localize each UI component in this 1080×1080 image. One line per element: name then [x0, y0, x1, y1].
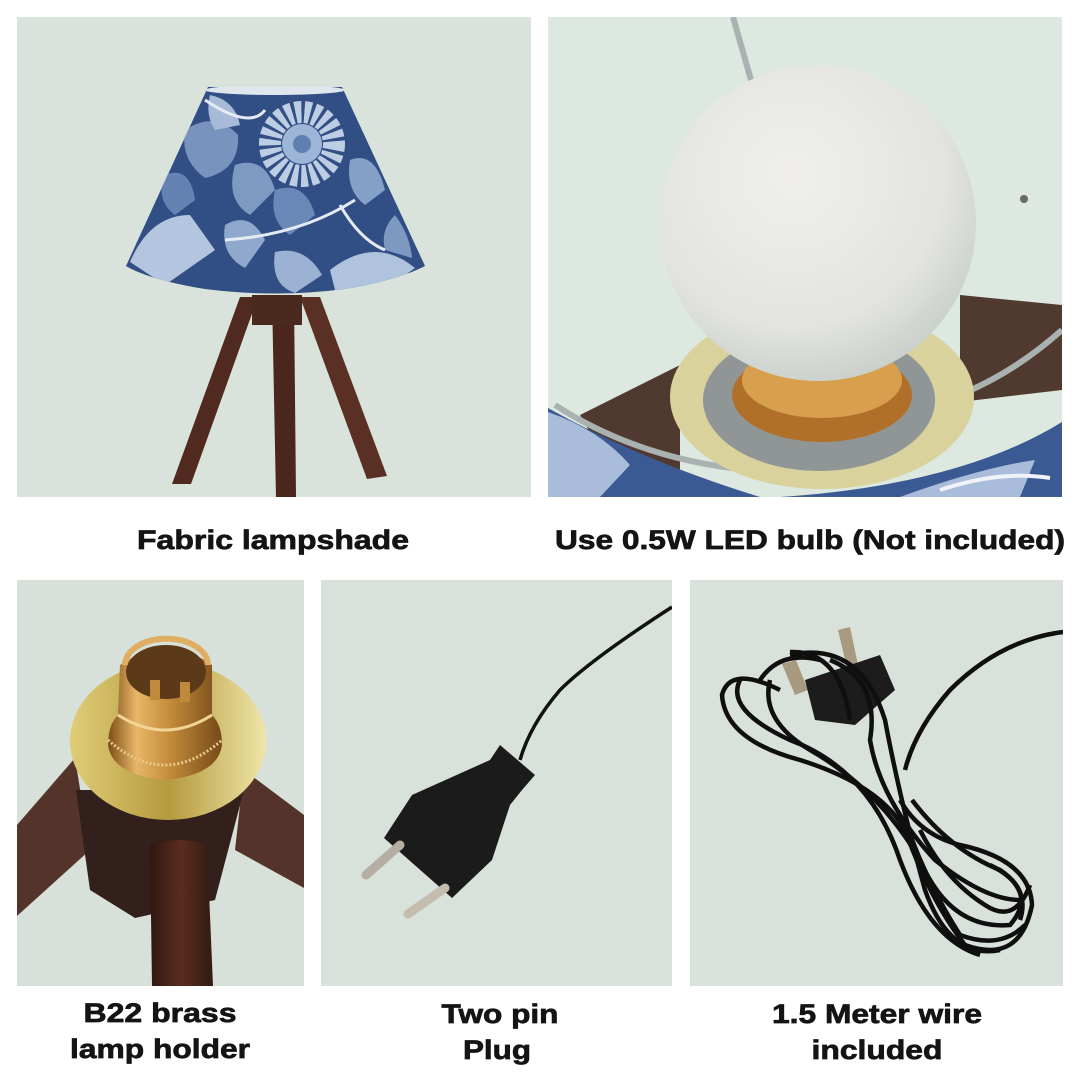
icon: blue floral lampshade [120, 80, 430, 300]
icon: wooden legs [17, 758, 304, 916]
icon: brass plate [670, 333, 974, 489]
icon: wooden legs behind bulb holder [580, 295, 1062, 480]
icon: plug body [805, 655, 895, 725]
panel: LED bulb photo [548, 17, 1062, 497]
icon: hexagonal wooden block [76, 790, 244, 918]
label: B22 brass lamp holder [70, 998, 251, 1064]
label: B22 brass lamp holder: lamp holder [70, 1034, 251, 1064]
label: wire length: 1.5 Meter wire [772, 999, 982, 1029]
icon: cable [520, 607, 672, 760]
icon: blue fabric edge [548, 408, 1062, 497]
icon: brass socket [732, 371, 912, 442]
label: two pin plug: Plug [463, 1035, 531, 1065]
icon: plug body [384, 745, 535, 898]
label: wire length: included [812, 1035, 942, 1065]
label: LED bulb: Use 0.5W LED bulb (Not included) [555, 525, 1065, 555]
label: wire length [772, 999, 982, 1065]
label: fabric lampshade: Fabric lampshade [137, 525, 409, 555]
label: two pin plug [442, 999, 558, 1065]
icon: plug pins [782, 627, 858, 695]
panel: B22 lamp holder photo [17, 580, 304, 986]
icon: white bulb [660, 65, 976, 381]
panel: two pin plug photo [321, 580, 672, 986]
icon: brass holder [108, 639, 222, 780]
icon: brass plate [70, 662, 266, 820]
icon: coiled black wire [722, 632, 1063, 955]
label: two pin plug: Two pin [442, 999, 558, 1029]
icon: plug pins [366, 845, 445, 914]
label: B22 brass lamp holder: B22 brass [84, 998, 236, 1028]
panel: fabric lampshade photo [17, 17, 531, 497]
icon: tripod wooden legs [172, 295, 387, 497]
icon: wires [555, 17, 1062, 470]
panel: coiled wire photo [690, 580, 1063, 986]
